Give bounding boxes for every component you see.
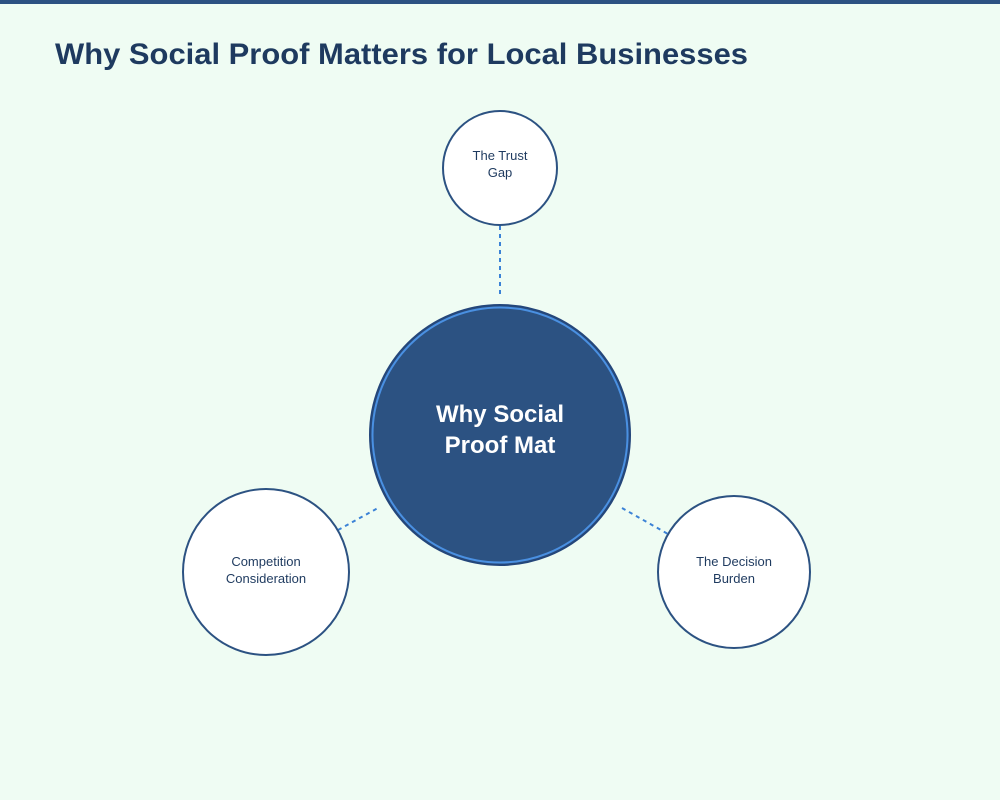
center circle: Why Social bbox=[436, 401, 564, 428]
center circle: Proof Mat bbox=[445, 432, 555, 459]
node: The Decision Burden: Burden bbox=[713, 571, 755, 586]
node: The Decision Burden: The Decision bbox=[696, 554, 772, 569]
node: The Trust Gap bbox=[443, 111, 557, 225]
connector: left bbox=[338, 508, 378, 530]
center circle bbox=[370, 305, 630, 565]
node: Competition Consideration: Consideration bbox=[226, 571, 306, 586]
node: The Decision Burden bbox=[658, 496, 810, 648]
connector: top bbox=[499, 226, 501, 296]
connector: right bbox=[622, 508, 668, 534]
node: Competition Consideration bbox=[183, 489, 349, 655]
title: Why Social Proof Matters for Local Businesses bbox=[55, 38, 748, 71]
node: The Trust Gap: Gap bbox=[488, 165, 512, 180]
node: The Trust Gap: The Trust bbox=[473, 148, 528, 163]
node: Competition Consideration: Competition bbox=[231, 554, 301, 569]
